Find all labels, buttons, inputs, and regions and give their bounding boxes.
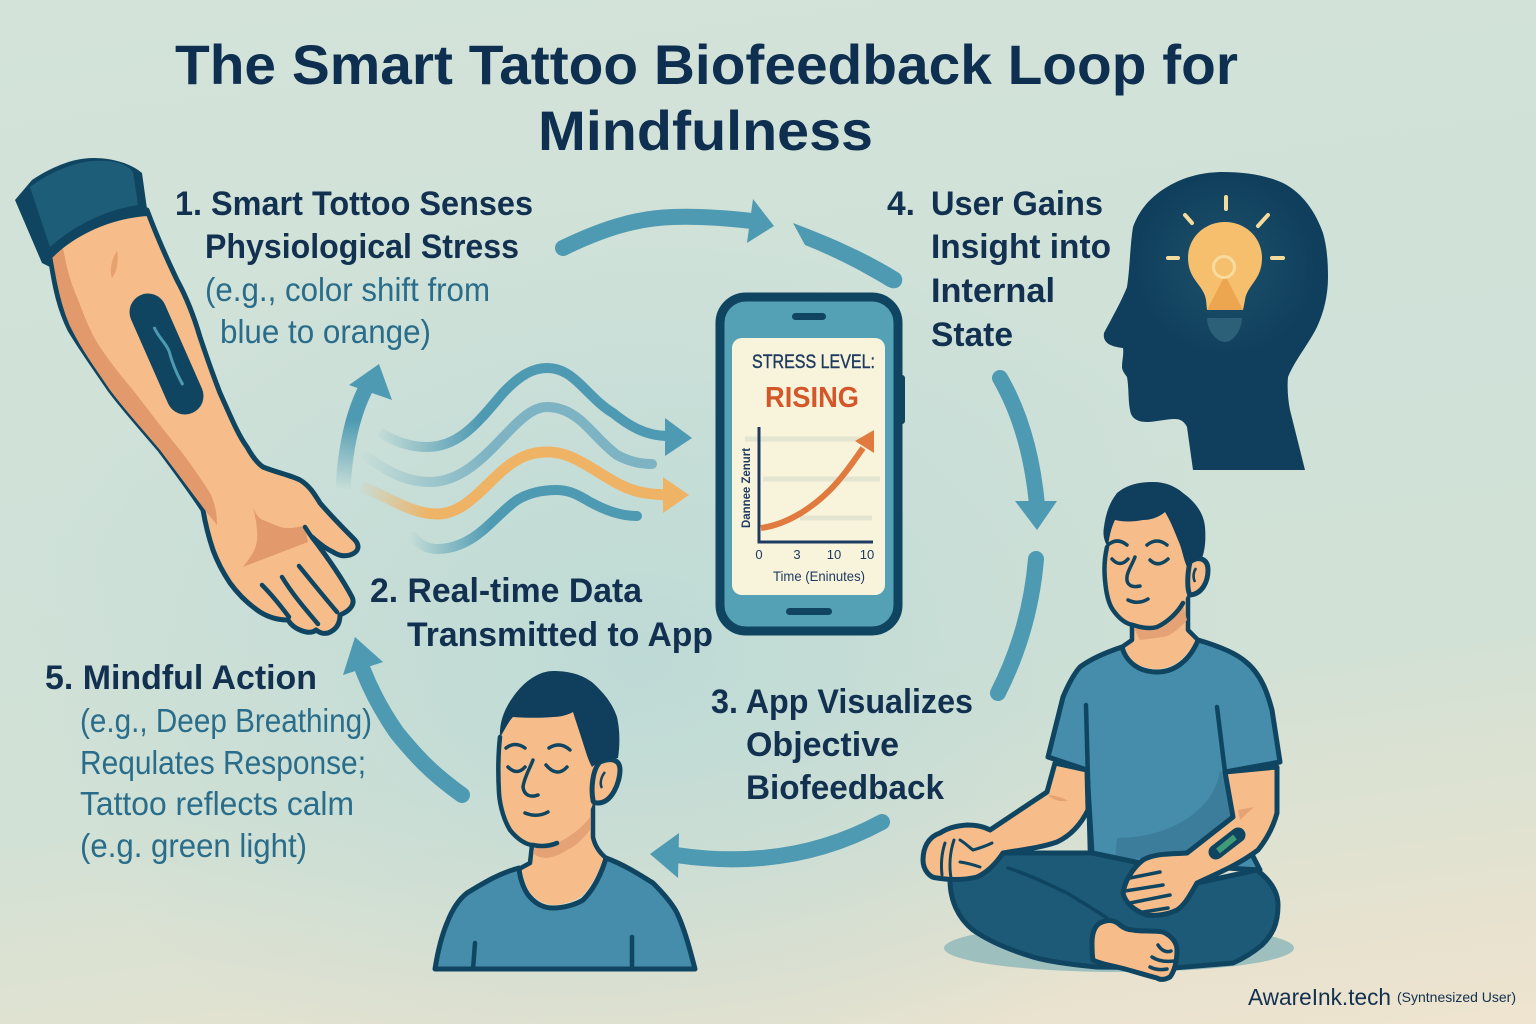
skin mark xyxy=(111,251,118,278)
foot xyxy=(1092,921,1177,979)
arrow: top to insight xyxy=(563,199,774,248)
footer credit: (Syntnesized User) xyxy=(1397,989,1516,1005)
illustration: phone xyxy=(720,297,905,631)
phone side button xyxy=(899,375,905,424)
line chart: 10 xyxy=(827,547,841,562)
face xyxy=(498,705,600,858)
neck xyxy=(519,800,606,905)
step 5 text xyxy=(45,659,372,864)
wave 4 xyxy=(413,490,637,549)
stress label: STRESS LEVEL: xyxy=(752,352,875,373)
ear xyxy=(592,760,620,803)
palm shading xyxy=(243,507,308,567)
illustration: forearm with smart tattoo xyxy=(15,158,358,633)
rising label: RISING xyxy=(765,382,859,414)
arm skin xyxy=(50,209,358,633)
wrist tattoo xyxy=(1216,835,1238,852)
step 4 text xyxy=(887,185,1111,354)
wave 2 xyxy=(367,407,652,482)
footer credit: AwareInk.tech xyxy=(1248,984,1391,1010)
step 1 text: blue to orange) xyxy=(220,313,431,350)
step 4 text: User Gains xyxy=(931,185,1103,223)
pants xyxy=(950,853,1278,968)
arrow: hand up to step 1 xyxy=(343,364,392,490)
step 4 text: Internal xyxy=(931,272,1055,310)
illustration: meditating person xyxy=(923,482,1294,979)
face xyxy=(1104,505,1195,640)
step 3 text: Biofeedback xyxy=(746,769,944,807)
title: The Smart Tattoo Biofeedback Loop for xyxy=(175,33,1238,96)
ground shadow xyxy=(944,924,1294,972)
line chart: Time (Eninutes) xyxy=(773,568,865,584)
step 5 text: Tattoo reflects calm xyxy=(80,785,354,822)
title xyxy=(175,33,1238,162)
wave 1 with arrowhead xyxy=(380,368,692,456)
hair xyxy=(500,671,619,767)
step 4 text: 4. xyxy=(887,185,915,223)
step 5 text: Requlates Response; xyxy=(80,744,366,781)
step 4 text: Insight into xyxy=(931,228,1111,266)
neck xyxy=(1122,585,1198,669)
footer credit xyxy=(1248,984,1516,1010)
step 1 text: 1. Smart Tottoo Senses xyxy=(175,185,533,223)
line chart: 3 xyxy=(793,547,801,562)
wave 3 orange with arrowhead xyxy=(362,452,689,514)
step 2 text xyxy=(370,572,713,654)
arrow: visualization to small figure xyxy=(650,822,882,878)
left arm and hand xyxy=(923,763,1088,879)
arrow: insight down to user xyxy=(1000,378,1057,530)
line chart xyxy=(739,427,880,584)
shirt xyxy=(435,858,695,969)
step 1 text: (e.g., color shift from xyxy=(205,271,490,308)
speaker xyxy=(792,313,826,320)
step 2 text: Transmitted to App xyxy=(407,616,713,654)
arrow: small figure to hand xyxy=(343,637,462,795)
step 5 text: 5. Mindful Action xyxy=(45,659,317,697)
illustration: calm user bust xyxy=(435,671,695,969)
arrow: curved segment to visualization xyxy=(998,559,1036,693)
step 1 text xyxy=(175,185,533,350)
finger lines xyxy=(262,527,337,624)
title: Mindfulness xyxy=(538,99,873,162)
hair xyxy=(1103,482,1205,567)
sleeve cuff xyxy=(15,158,148,268)
step 4 text: State xyxy=(931,316,1013,354)
step 3 text: 3. App Visualizes xyxy=(711,683,973,721)
step 2 text: 2. Real-time Data xyxy=(370,572,643,610)
arm shadow strip xyxy=(52,248,217,525)
home bar xyxy=(786,608,832,615)
smart tattoo patch xyxy=(148,312,185,396)
illustration: head silhouette with lightbulb xyxy=(1104,172,1328,470)
data waves xyxy=(362,368,692,549)
chart axis labels: Dannee Zenurt xyxy=(739,448,753,528)
step 5 text: (e.g. green light) xyxy=(80,827,307,864)
step 3 text xyxy=(711,683,973,807)
right arm and hand xyxy=(1123,767,1277,915)
line chart: 10 xyxy=(860,547,874,562)
ear xyxy=(1188,559,1208,595)
arrow: insight back to top xyxy=(793,223,902,288)
screen xyxy=(732,338,885,595)
shirt xyxy=(1048,640,1280,870)
line chart: 0 xyxy=(755,547,763,562)
step 3 text: Objective xyxy=(746,726,899,764)
phone body xyxy=(720,297,898,631)
lightbulb xyxy=(1168,197,1283,342)
step 5 text: (e.g., Deep Breathing) xyxy=(80,702,372,739)
step 1 text: Physiological Stress xyxy=(205,228,519,266)
